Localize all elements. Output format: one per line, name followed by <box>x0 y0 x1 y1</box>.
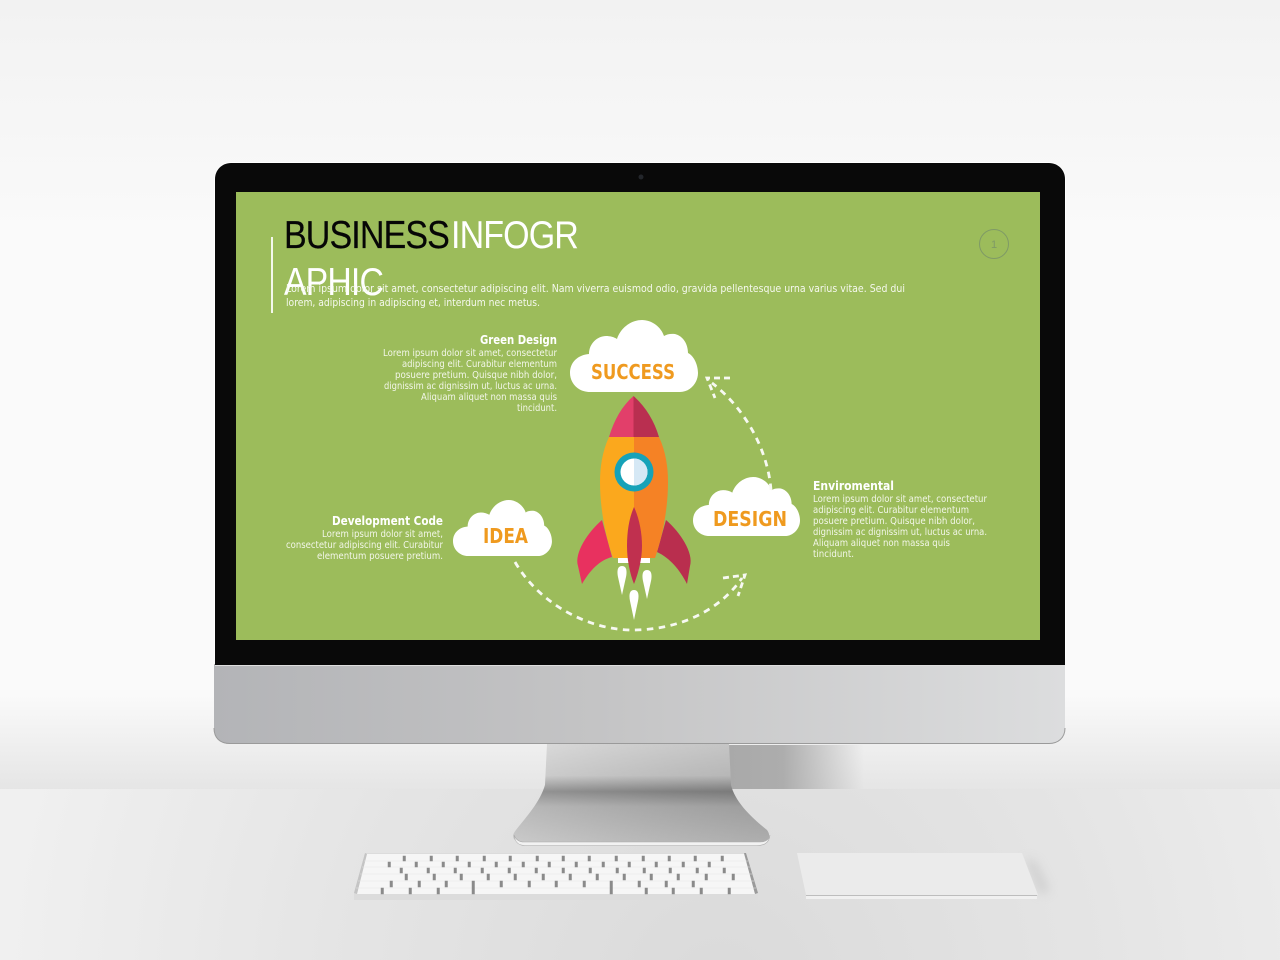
monitor bezel <box>215 163 1065 665</box>
text block: enviromental: Enviromental <box>813 479 894 493</box>
title: BUSINESS <box>284 214 449 257</box>
arrow: design to success <box>707 378 771 490</box>
intro paragraph: lorem, adipiscing in adipiscing et, interdum nec metus. <box>286 297 540 309</box>
rocket flames <box>617 557 652 620</box>
arrow: idea to design <box>515 562 745 630</box>
cloud: success <box>570 320 698 392</box>
monitor <box>214 162 1066 744</box>
keyboard row separators <box>356 861 756 888</box>
keyboard key surface <box>357 854 755 894</box>
rocket window <box>614 452 654 492</box>
text block: green design: adipiscing elit. Curabitur elementum <box>402 359 557 370</box>
monitor stand <box>513 744 770 846</box>
page number badge <box>980 230 1008 258</box>
text block: development code <box>286 514 444 562</box>
intro paragraph <box>286 283 905 309</box>
rocket right wing <box>657 520 691 584</box>
text block: green design: posuere pretium. Quisque nibh dolor, <box>395 370 557 381</box>
text block: green design: dignissim ac dignissim ut, luctus ac urna. <box>384 381 557 392</box>
keyboard left edge <box>354 853 367 894</box>
chin top highlight <box>215 665 1065 666</box>
text block: development code: elementum posuere pretium. <box>317 551 443 562</box>
keyboard right edge <box>744 853 758 894</box>
title accent line <box>271 237 273 313</box>
rocket illustration <box>577 396 691 620</box>
text block: development code: consectetur adipiscing elit. Curabitur <box>286 540 444 551</box>
trackpad <box>797 853 1050 899</box>
rocket left wing <box>577 520 612 584</box>
text block: enviromental: tincidunt. <box>813 549 854 560</box>
cloud: success: SUCCESS <box>591 360 675 384</box>
title: INFOGR <box>451 214 578 257</box>
text block: green design: Aliquam aliquet non massa quis <box>421 392 557 403</box>
monitor halo <box>214 162 1066 672</box>
rocket body left half <box>600 437 634 558</box>
keyboard <box>354 853 758 900</box>
text block: enviromental: Lorem ipsum dolor sit amet, consectetur <box>813 494 988 505</box>
cloud: design <box>693 477 800 536</box>
webcam <box>638 174 644 180</box>
text block: enviromental <box>813 479 988 560</box>
text block: green design <box>383 333 558 414</box>
title <box>284 214 578 304</box>
text block: development code: Lorem ipsum dolor sit amet, <box>322 529 443 540</box>
text block: enviromental: Aliquam aliquet non massa quis <box>813 538 950 549</box>
text block: enviromental: posuere pretium. Quisque nibh dolor, <box>813 516 975 527</box>
rocket body right half <box>634 437 668 558</box>
screen panel <box>236 192 1040 640</box>
cloud: idea <box>453 500 552 556</box>
title: APHIC <box>284 261 383 304</box>
text block: development code: Development Code <box>332 514 443 528</box>
cloud: idea: IDEA <box>483 524 528 548</box>
rocket nose right half <box>634 396 659 437</box>
text block: green design: tincidunt. <box>517 403 557 414</box>
keyboard key gaps <box>381 856 734 894</box>
keyboard base <box>354 853 758 900</box>
cloud: design: DESIGN <box>713 507 787 531</box>
text block: green design: Lorem ipsum dolor sit amet, consectetur <box>383 348 558 359</box>
rocket center fin <box>627 507 642 584</box>
monitor chin <box>214 664 1065 744</box>
rocket nose left half <box>609 396 634 437</box>
text block: green design: Green Design <box>480 333 557 347</box>
chin bottom edge <box>214 728 1065 744</box>
text block: enviromental: adipiscing elit. Curabitur elementum <box>813 505 969 516</box>
intro paragraph: Lorem ipsum dolor sit amet, consectetur adipiscing elit. Nam viverra euismod odio, gravida pellentesque urna varius vitae. Sed dui <box>286 283 905 295</box>
page number badge: 1 <box>991 239 997 251</box>
text block: enviromental: dignissim ac dignissim ut, luctus ac urna. <box>813 527 987 538</box>
